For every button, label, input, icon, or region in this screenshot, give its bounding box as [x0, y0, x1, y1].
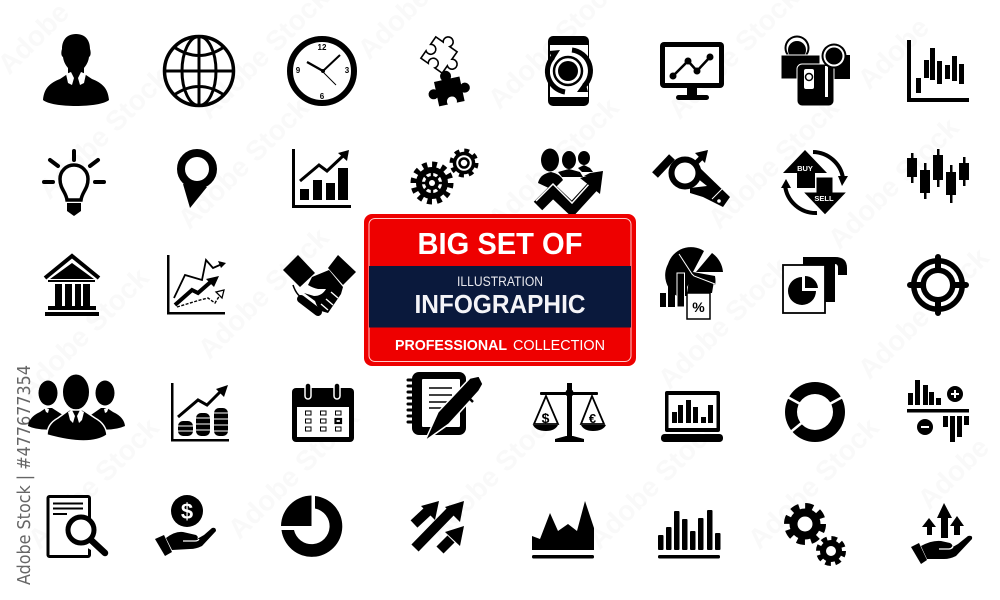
- icon: bar chart with axis: [907, 40, 969, 102]
- watermark pattern: Adobe Stock: [582, 412, 725, 555]
- banner main word: INFOGRAPHIC: [414, 289, 586, 319]
- banner: [364, 214, 636, 366]
- icon: growth bars with arrow: [292, 149, 351, 208]
- icon: area chart: [532, 501, 594, 558]
- icon: pie and bars with percent: [660, 247, 723, 319]
- icon: clock: 6: [320, 92, 325, 101]
- icon: calendar: [292, 383, 354, 442]
- watermark pattern: Adobe Stock: [32, 62, 175, 205]
- icon: positive and negative bars: [907, 380, 969, 442]
- stock id side text: Adobe Stock | #477677354: [14, 365, 35, 585]
- icon: buy and sell arrows: [781, 150, 848, 215]
- icon: clock: 9: [296, 66, 301, 75]
- watermark pattern: Adobe Stock: [172, 92, 315, 235]
- icon: two solid gears: [787, 506, 844, 564]
- watermark pattern: Adobe Stock: [482, 92, 625, 235]
- icon: hand holding magnifier with arrow: [655, 150, 730, 207]
- icon: clock: 12: [318, 43, 327, 52]
- icon: document search: [48, 496, 105, 556]
- banner red background: [364, 214, 636, 366]
- icon: multi-line chart: [167, 255, 226, 314]
- icon: light bulb: [44, 151, 104, 216]
- icon: laptop with chart: [661, 391, 723, 442]
- watermark pattern: Adobe Stock: [422, 402, 565, 545]
- icon: bar chart on baseline: [658, 510, 720, 558]
- icon: handshake: [283, 255, 356, 313]
- icon: pie and bars with percent: %: [692, 299, 705, 315]
- banner footer right: COLLECTION: [513, 337, 605, 354]
- icon: donut with slice: [281, 496, 342, 557]
- watermark pattern: Adobe Stock: [652, 252, 795, 395]
- watermark pattern: Adobe: [852, 12, 935, 95]
- icon: clock: 3: [345, 66, 350, 75]
- icon: hand with growth arrows: [911, 503, 972, 564]
- watermark pattern: Adobe: [912, 432, 995, 515]
- banner navy band: [369, 266, 631, 328]
- icon: balance scales: [533, 383, 606, 442]
- banner inner outline: [369, 218, 631, 362]
- watermark pattern: Adobe Stock: [222, 402, 365, 545]
- icon: map pin: [181, 153, 213, 208]
- banner heading: BIG SET OF: [418, 226, 582, 261]
- watermark pattern: Adobe Stock: [822, 112, 965, 255]
- icon: globe: [164, 36, 234, 106]
- icon: team of three: [28, 374, 125, 441]
- watermark pattern: Adobe Stock: [12, 262, 155, 405]
- icon: bank building: [45, 256, 99, 316]
- icon: team with zigzag arrow: [536, 148, 603, 209]
- icon: cards and magnifier: [781, 36, 850, 106]
- watermark pattern: Adobe Stock: [22, 412, 165, 555]
- icon: two cogs: [414, 150, 476, 202]
- icon: coins with growth arrow: [171, 383, 229, 442]
- watermark pattern: Adobe Stock: [192, 222, 335, 365]
- icon: buy and sell arrows: SELL: [814, 194, 834, 203]
- icon: smartphone sync: [547, 36, 590, 106]
- icon: balance scales: $: [542, 410, 550, 426]
- icon: three up arrows: [414, 501, 464, 550]
- icon: segmented donut: [782, 382, 848, 442]
- watermark pattern: Adobe Stock: [852, 242, 995, 385]
- banner footer left: PROFESSIONAL: [395, 337, 507, 354]
- icon: target crosshair: [910, 257, 966, 313]
- icon: monitor with line chart: [660, 42, 724, 100]
- icon: clock: [290, 39, 354, 103]
- banner subheading: ILLUSTRATION: [457, 274, 543, 289]
- icon: puzzle pieces: [421, 30, 472, 108]
- watermark pattern: Adobe Stock: [742, 412, 885, 555]
- icon: notebook and pen: [408, 372, 483, 441]
- icon: report with pie: [783, 257, 847, 313]
- icon: hand holding dollar coin: $: [181, 499, 193, 524]
- icon: candlestick chart: [907, 149, 969, 203]
- icon: hand holding dollar coin: [155, 495, 216, 556]
- icon: businessman: [43, 34, 109, 106]
- icon: buy and sell arrows: BUY: [797, 164, 813, 173]
- icon: balance scales: €: [589, 411, 596, 426]
- watermark pattern: Adobe Stock: [702, 92, 845, 235]
